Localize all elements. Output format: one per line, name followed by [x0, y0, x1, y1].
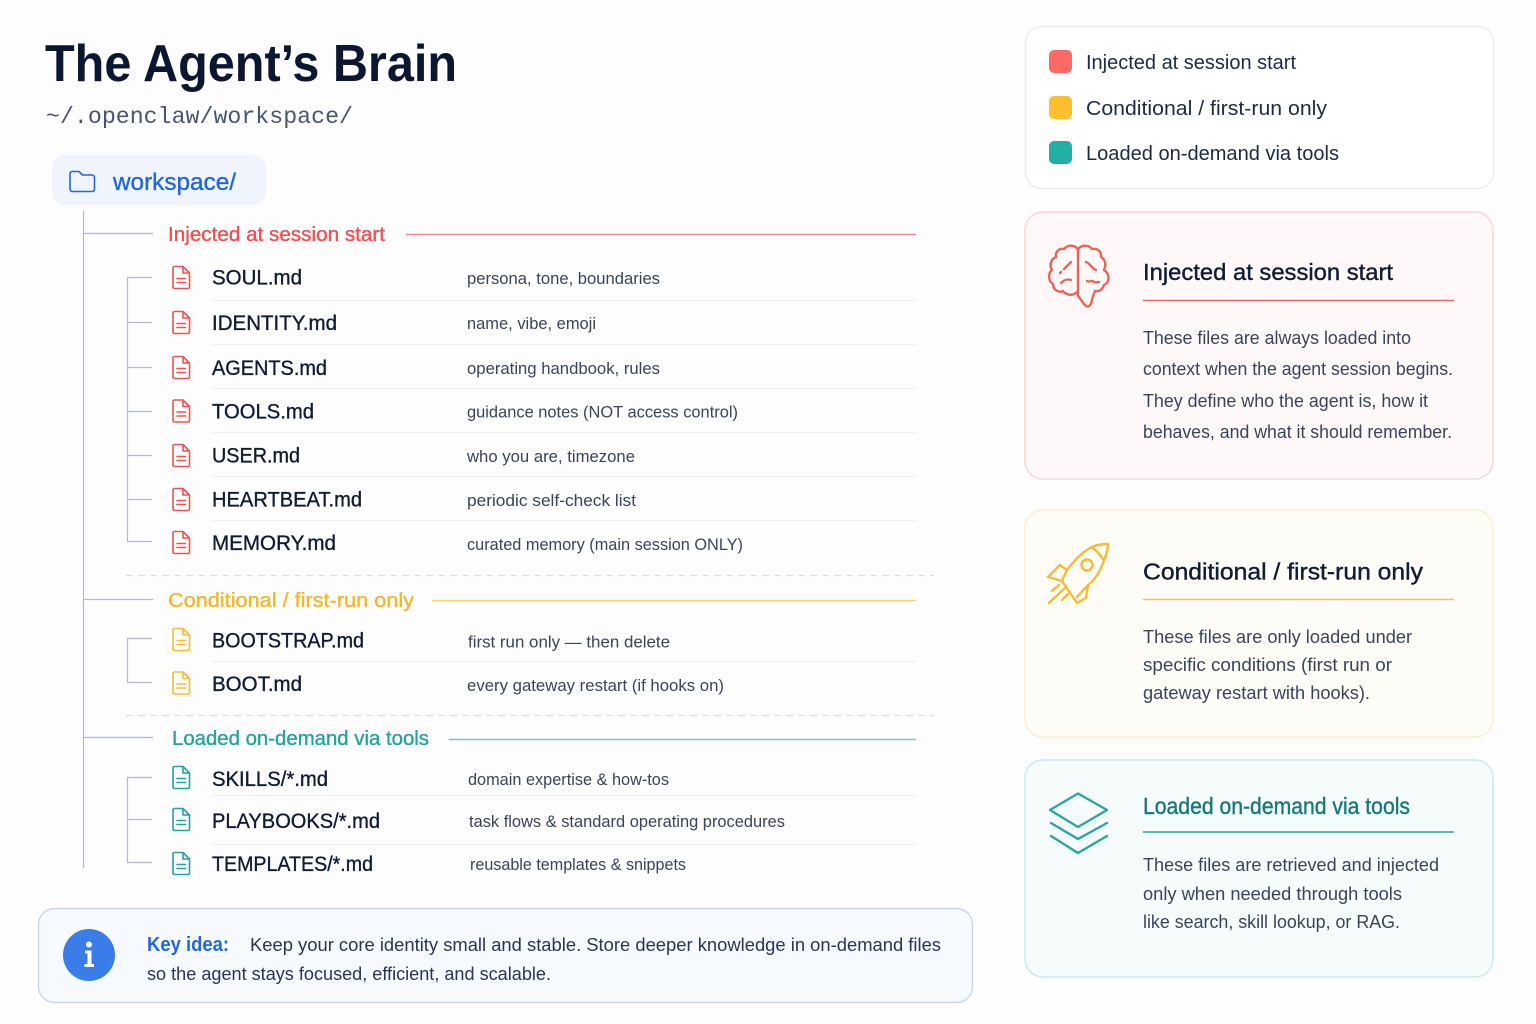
- panel description: like search, skill lookup, or RAG.: [1143, 911, 1400, 932]
- callout text: so the agent stays focused, efficient, and scalable.: [147, 963, 551, 984]
- file row: AGENTS.md: operating handbook, rules: [467, 360, 660, 378]
- icon: rocket: [1048, 544, 1108, 603]
- file row: BOOTSTRAP.md: first run only — then delete: [468, 634, 670, 652]
- callout text: Key idea:: [147, 934, 229, 956]
- panel description: only when needed through tools: [1143, 883, 1402, 904]
- file row: MEMORY.md: [173, 532, 743, 555]
- title: The Agent’s Brain: [45, 35, 457, 93]
- file row: HEARTBEAT.md: periodic self-check list: [467, 492, 636, 510]
- file row: TOOLS.md: [173, 400, 738, 424]
- tree trunk: [82, 211, 84, 868]
- callout text: [147, 934, 941, 984]
- panel description: gateway restart with hooks).: [1143, 682, 1370, 703]
- file row: PLAYBOOKS/*.md: PLAYBOOKS/*.md: [212, 810, 380, 833]
- panel description: context when the agent session begins.: [1143, 358, 1453, 379]
- file row: IDENTITY.md: IDENTITY.md: [212, 312, 337, 335]
- panel heading: Conditional / first-run only: [1143, 558, 1424, 584]
- file row: HEARTBEAT.md: [173, 488, 636, 512]
- file row: TEMPLATES/*.md: TEMPLATES/*.md: [212, 853, 373, 876]
- file row: SOUL.md: SOUL.md: [212, 266, 302, 290]
- file row: SOUL.md: persona, tone, boundaries: [467, 270, 660, 288]
- file row: PLAYBOOKS/*.md: [173, 808, 785, 833]
- file row: SOUL.md: [173, 266, 660, 290]
- panel description: [1143, 327, 1453, 442]
- panel description: [1143, 626, 1412, 703]
- file row: TOOLS.md: TOOLS.md: [212, 400, 314, 424]
- file row: IDENTITY.md: name, vibe, emoji: [467, 315, 596, 333]
- file row: SKILLS/*.md: domain expertise & how-tos: [468, 771, 669, 789]
- file row: SKILLS/*.md: SKILLS/*.md: [212, 768, 328, 791]
- panel: conditional / first-run only: [1025, 510, 1493, 737]
- callout text: Keep your core identity small and stable. Store deeper knowledge in on-demand files: [250, 934, 941, 955]
- panel description: They define who the agent is, how it: [1143, 390, 1428, 411]
- legend panel: [1026, 26, 1494, 188]
- icon: brain: [1049, 246, 1108, 307]
- panel heading: Injected at session start: [1143, 259, 1394, 285]
- panel description: These files are only loaded under: [1143, 626, 1412, 647]
- file row: AGENTS.md: [173, 356, 660, 380]
- callout: key idea: [38, 908, 972, 1002]
- file row: AGENTS.md: AGENTS.md: [212, 357, 327, 380]
- file row: PLAYBOOKS/*.md: task flows & standard operating procedures: [469, 813, 785, 831]
- file row: BOOTSTRAP.md: [173, 628, 670, 652]
- panel: injected at session start: [1025, 212, 1493, 479]
- subtitle: workspace path: ~/.openclaw/workspace/: [46, 104, 353, 130]
- file row: BOOTSTRAP.md: BOOTSTRAP.md: [212, 630, 364, 652]
- section: loaded on-demand via tools: [84, 727, 916, 876]
- section: injected at session start: [84, 223, 916, 555]
- legend item: conditional: Conditional / first-run only: [1086, 98, 1327, 120]
- section heading: Injected at session start: [168, 223, 385, 246]
- panel description: specific conditions (first run or: [1143, 654, 1392, 675]
- folder name: workspace/: [112, 169, 236, 196]
- panel: loaded on-demand via tools: [1025, 760, 1493, 977]
- file row: HEARTBEAT.md: HEARTBEAT.md: [212, 488, 362, 512]
- panel heading: Loaded on-demand via tools: [1143, 793, 1410, 819]
- file row: USER.md: who you are, timezone: [466, 448, 635, 466]
- icon: layers: [1050, 794, 1107, 853]
- root folder chip: [52, 155, 266, 205]
- section heading: Conditional / first-run only: [168, 589, 415, 612]
- file row: SKILLS/*.md: [173, 766, 669, 791]
- legend item: on-demand: Loaded on-demand via tools: [1086, 143, 1339, 165]
- panel description: These files are retrieved and injected: [1143, 854, 1439, 875]
- file row: TOOLS.md: guidance notes (NOT access control): [467, 404, 738, 422]
- panel description: These files are always loaded into: [1143, 327, 1411, 348]
- file row: BOOT.md: every gateway restart (if hooks on): [467, 677, 724, 695]
- section: conditional / first-run only: [84, 589, 916, 696]
- file row: IDENTITY.md: [173, 312, 596, 335]
- legend item: injected: Injected at session start: [1086, 52, 1296, 74]
- file row: USER.md: USER.md: [212, 444, 300, 468]
- panel description: behaves, and what it should remember.: [1143, 421, 1452, 442]
- file row: TEMPLATES/*.md: reusable templates & snippets: [470, 856, 686, 874]
- section heading: Loaded on-demand via tools: [172, 727, 429, 750]
- file row: USER.md: [173, 444, 635, 468]
- file row: MEMORY.md: curated memory (main session ONLY): [467, 536, 743, 554]
- icon: info: [63, 929, 115, 981]
- file row: MEMORY.md: MEMORY.md: [212, 532, 336, 555]
- file row: BOOT.md: BOOT.md: [212, 673, 302, 696]
- icon: folder: [70, 172, 94, 192]
- file row: TEMPLATES/*.md: [173, 852, 686, 876]
- panel description: [1143, 854, 1439, 932]
- file row: BOOT.md: [173, 672, 724, 696]
